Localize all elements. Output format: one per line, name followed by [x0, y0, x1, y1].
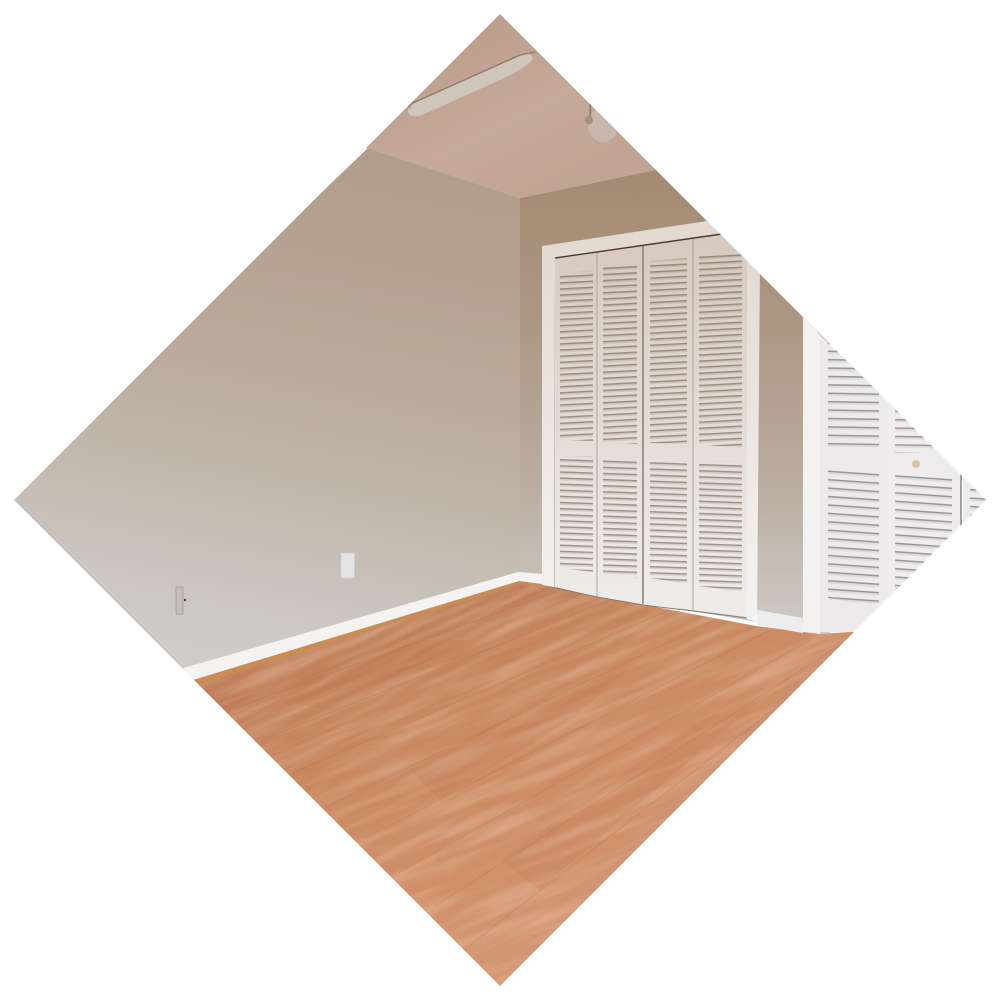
right closet frame [803, 315, 820, 634]
back wall [520, 170, 830, 640]
wall plate [176, 587, 186, 614]
closet door 2 [597, 245, 643, 604]
door knob [912, 460, 920, 468]
left wall [0, 148, 520, 690]
baseboard [180, 572, 542, 685]
floor plank seams [230, 590, 850, 945]
ceiling fan mount [585, 103, 618, 142]
right door 2 [888, 400, 962, 600]
floor plank tone patches [424, 711, 646, 886]
light wood grain [199, 585, 842, 984]
right closet [803, 315, 990, 634]
closet frame [542, 221, 760, 622]
right door divider [960, 473, 962, 527]
ceiling light fixture [408, 52, 535, 116]
right door 3 [963, 477, 986, 523]
closet door 1 [555, 252, 597, 597]
closet door 4 [693, 230, 747, 617]
main closet [542, 221, 760, 622]
door seams [642, 245, 644, 604]
closet top gap [555, 234, 722, 258]
closet door 3 [643, 238, 693, 610]
baseboard right [757, 610, 803, 633]
ceiling [365, 14, 656, 198]
outlet [341, 553, 354, 578]
floor [198, 584, 854, 986]
right door 1 [820, 335, 888, 632]
wood grain [219, 591, 850, 978]
